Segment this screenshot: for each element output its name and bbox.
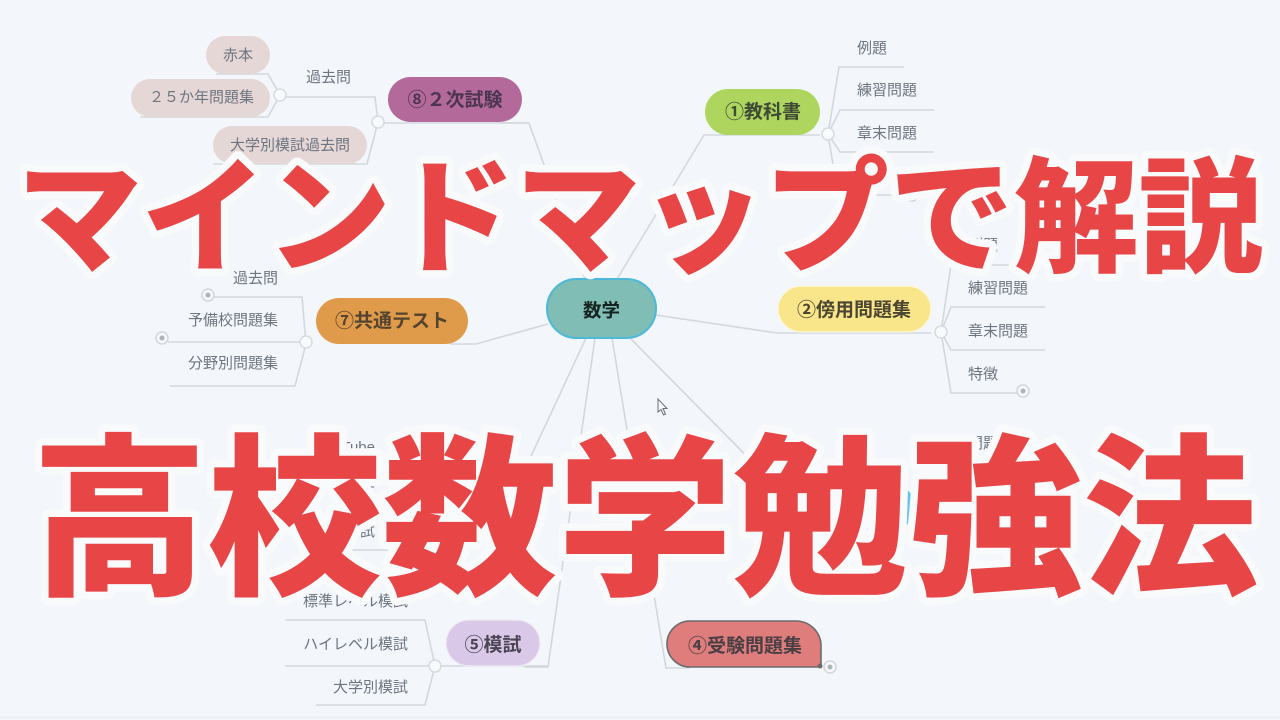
label: exercises: 練習問題	[857, 82, 917, 99]
title line 1: マインドマップで解説	[17, 150, 1263, 289]
branch: 7 common test	[156, 270, 468, 386]
hidden branch fragments: 6: 塾・予備校社	[285, 481, 375, 498]
central topic: mathematics	[547, 279, 656, 338]
topic: mock exams	[446, 620, 540, 666]
topic: supplementary problem book	[778, 286, 931, 332]
label: standard level mocks: 標準レベル模試	[303, 593, 408, 610]
branch: 3 hidden blue topic	[835, 435, 1000, 530]
label: high level mocks: ハイレベル模試	[303, 636, 408, 653]
connectors from central topic	[400, 123, 931, 668]
branch: 8 second-stage exam	[131, 36, 529, 164]
topic: textbook: ①教科書	[725, 100, 801, 123]
topic: textbook	[705, 89, 820, 135]
label: prep school problem books: 予備校問題集	[188, 312, 278, 329]
topic: second-stage exam: ⑧２次試験	[407, 89, 503, 111]
branch: 2 supplementary problem book	[778, 237, 1045, 397]
hidden branch fragments: 6	[285, 439, 392, 550]
topic: common test: ⑦共通テスト	[335, 310, 449, 332]
label: features: 特徴	[968, 366, 998, 383]
collapsed node: past exams	[202, 289, 214, 301]
branch: 1 textbook	[705, 40, 934, 201]
topic: supplementary problem book: ②傍用問題集	[797, 299, 911, 321]
hidden branch fragments: 6: 参考書模試	[300, 523, 375, 540]
label: past exams: 過去問	[306, 69, 351, 86]
label: examples: 例題	[857, 40, 887, 57]
label: exercises: 練習問題	[968, 280, 1028, 297]
topic: second-stage exam	[388, 77, 522, 122]
node: past exams	[274, 89, 286, 101]
collapsed node: features	[1017, 385, 1029, 397]
selection handle	[818, 664, 822, 668]
hidden branch fragments: 6: YouTube	[316, 439, 375, 456]
collapsed node: prep school	[156, 332, 168, 344]
label: university mocks: 大学別模試	[333, 679, 408, 696]
label: chapter problems: 章末問題	[968, 323, 1028, 340]
pill: 25-year problem book: ２５か年問題集	[149, 89, 254, 106]
topic: blue	[835, 484, 915, 530]
collapsed node: textbook	[906, 189, 918, 201]
branch: 5 mock exams	[285, 593, 548, 705]
pill: akahon: 赤本	[223, 47, 253, 64]
node: textbook	[822, 128, 834, 140]
label: examples: 例題	[968, 237, 998, 254]
label: past exams: 過去問	[233, 270, 278, 287]
node: common test	[300, 336, 312, 348]
topic: exam problem book	[667, 621, 821, 667]
icon: mouse cursor	[658, 399, 667, 415]
node: supplementary	[935, 326, 947, 338]
pill: university mock past exams: 大学別模試過去問	[230, 137, 350, 154]
label: by-field problem books: 分野別問題集	[188, 355, 278, 372]
central topic: mathematics: 数学	[583, 300, 620, 321]
collapsed node: exam problem book	[824, 661, 836, 673]
pill: university mock past exams	[213, 126, 367, 164]
topic: mock exams: ⑤模試	[464, 634, 522, 656]
branch: 4 exam problem book	[667, 621, 836, 673]
topic: exam problem book: ④受験問題集	[688, 634, 802, 657]
node: mock exams	[429, 660, 441, 672]
pill: 25-year problem book	[131, 79, 270, 117]
node: second-stage exam	[372, 116, 384, 128]
title line 2: 高校数学勉強法	[32, 423, 1258, 618]
label: fragment: 問題	[968, 435, 998, 452]
topic: common test	[316, 298, 468, 344]
pill: akahon	[206, 36, 270, 74]
label: chapter problems: 章末問題	[857, 125, 917, 142]
